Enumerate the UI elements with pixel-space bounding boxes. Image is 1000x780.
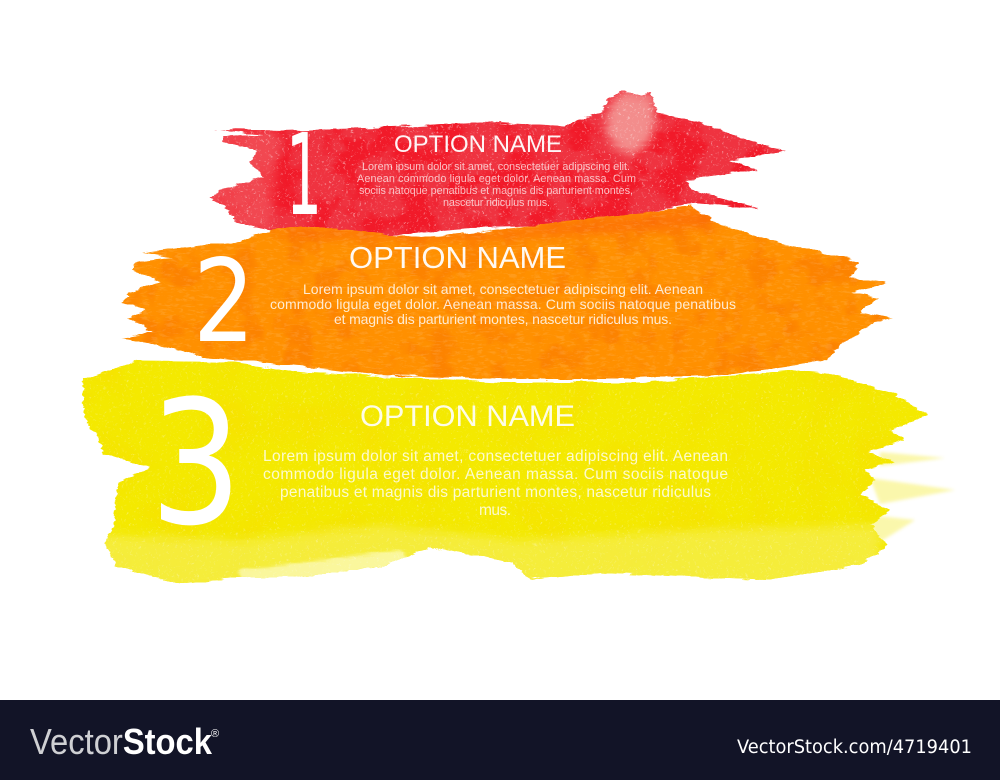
footer bar <box>0 700 1000 780</box>
option 1 body text: nascetur ridiculus mus. <box>443 197 550 209</box>
panel: option 1 red <box>210 90 786 236</box>
option 2 body text: commodo ligula eget dolor. Aenean massa. Cum sociis natoque penatibus <box>270 296 736 312</box>
option 3 body text: mus. <box>479 502 511 519</box>
panel: option 2 orange <box>115 200 905 385</box>
registered mark: ® <box>211 728 219 740</box>
option 1 numeral: 1 <box>286 111 322 241</box>
option 2 heading: OPTION NAME <box>349 240 566 275</box>
panel: option 3 yellow <box>70 350 955 590</box>
VectorStock logo: VectorStock <box>30 721 213 762</box>
brush stroke: yellow <box>70 350 955 590</box>
option 2 body text <box>270 281 736 327</box>
option 3 numeral: 3 <box>150 363 242 564</box>
option 3 body text: penatibus et magnis dis parturient montes, nascetur ridiculus <box>280 484 711 501</box>
option 3 body text: Lorem ipsum dolor sit amet, consectetuer adipiscing elit. Aenean <box>263 448 728 465</box>
option 1 body text <box>357 161 636 209</box>
option 3 body text <box>263 448 728 519</box>
brush stroke: red <box>210 90 786 236</box>
option 2 body text: Lorem ipsum dolor sit amet, consectetuer adipiscing elit. Aenean <box>303 281 703 297</box>
option 1 heading: OPTION NAME <box>394 131 562 158</box>
option 1 body text: sociis natoque penatibus et magnis dis parturient montes, <box>359 185 633 197</box>
option 3 heading: OPTION NAME <box>360 400 575 433</box>
brush stroke: orange <box>115 200 905 385</box>
option 2 body text: et magnis dis parturient montes, nascetur ridiculus mus. <box>334 311 672 327</box>
option 1 body text: Lorem ipsum dolor sit amet, consectetuer adipiscing elit. <box>362 161 630 173</box>
image id: VectorStock.com/4719401 <box>737 737 972 758</box>
option 2 numeral: 2 <box>193 235 255 368</box>
option 3 body text: commodo ligula eget dolor. Aenean massa. Cum sociis natoque <box>263 466 728 483</box>
option 1 body text: Aenean commodo ligula eget dolor. Aenean massa. Cum <box>357 173 636 185</box>
